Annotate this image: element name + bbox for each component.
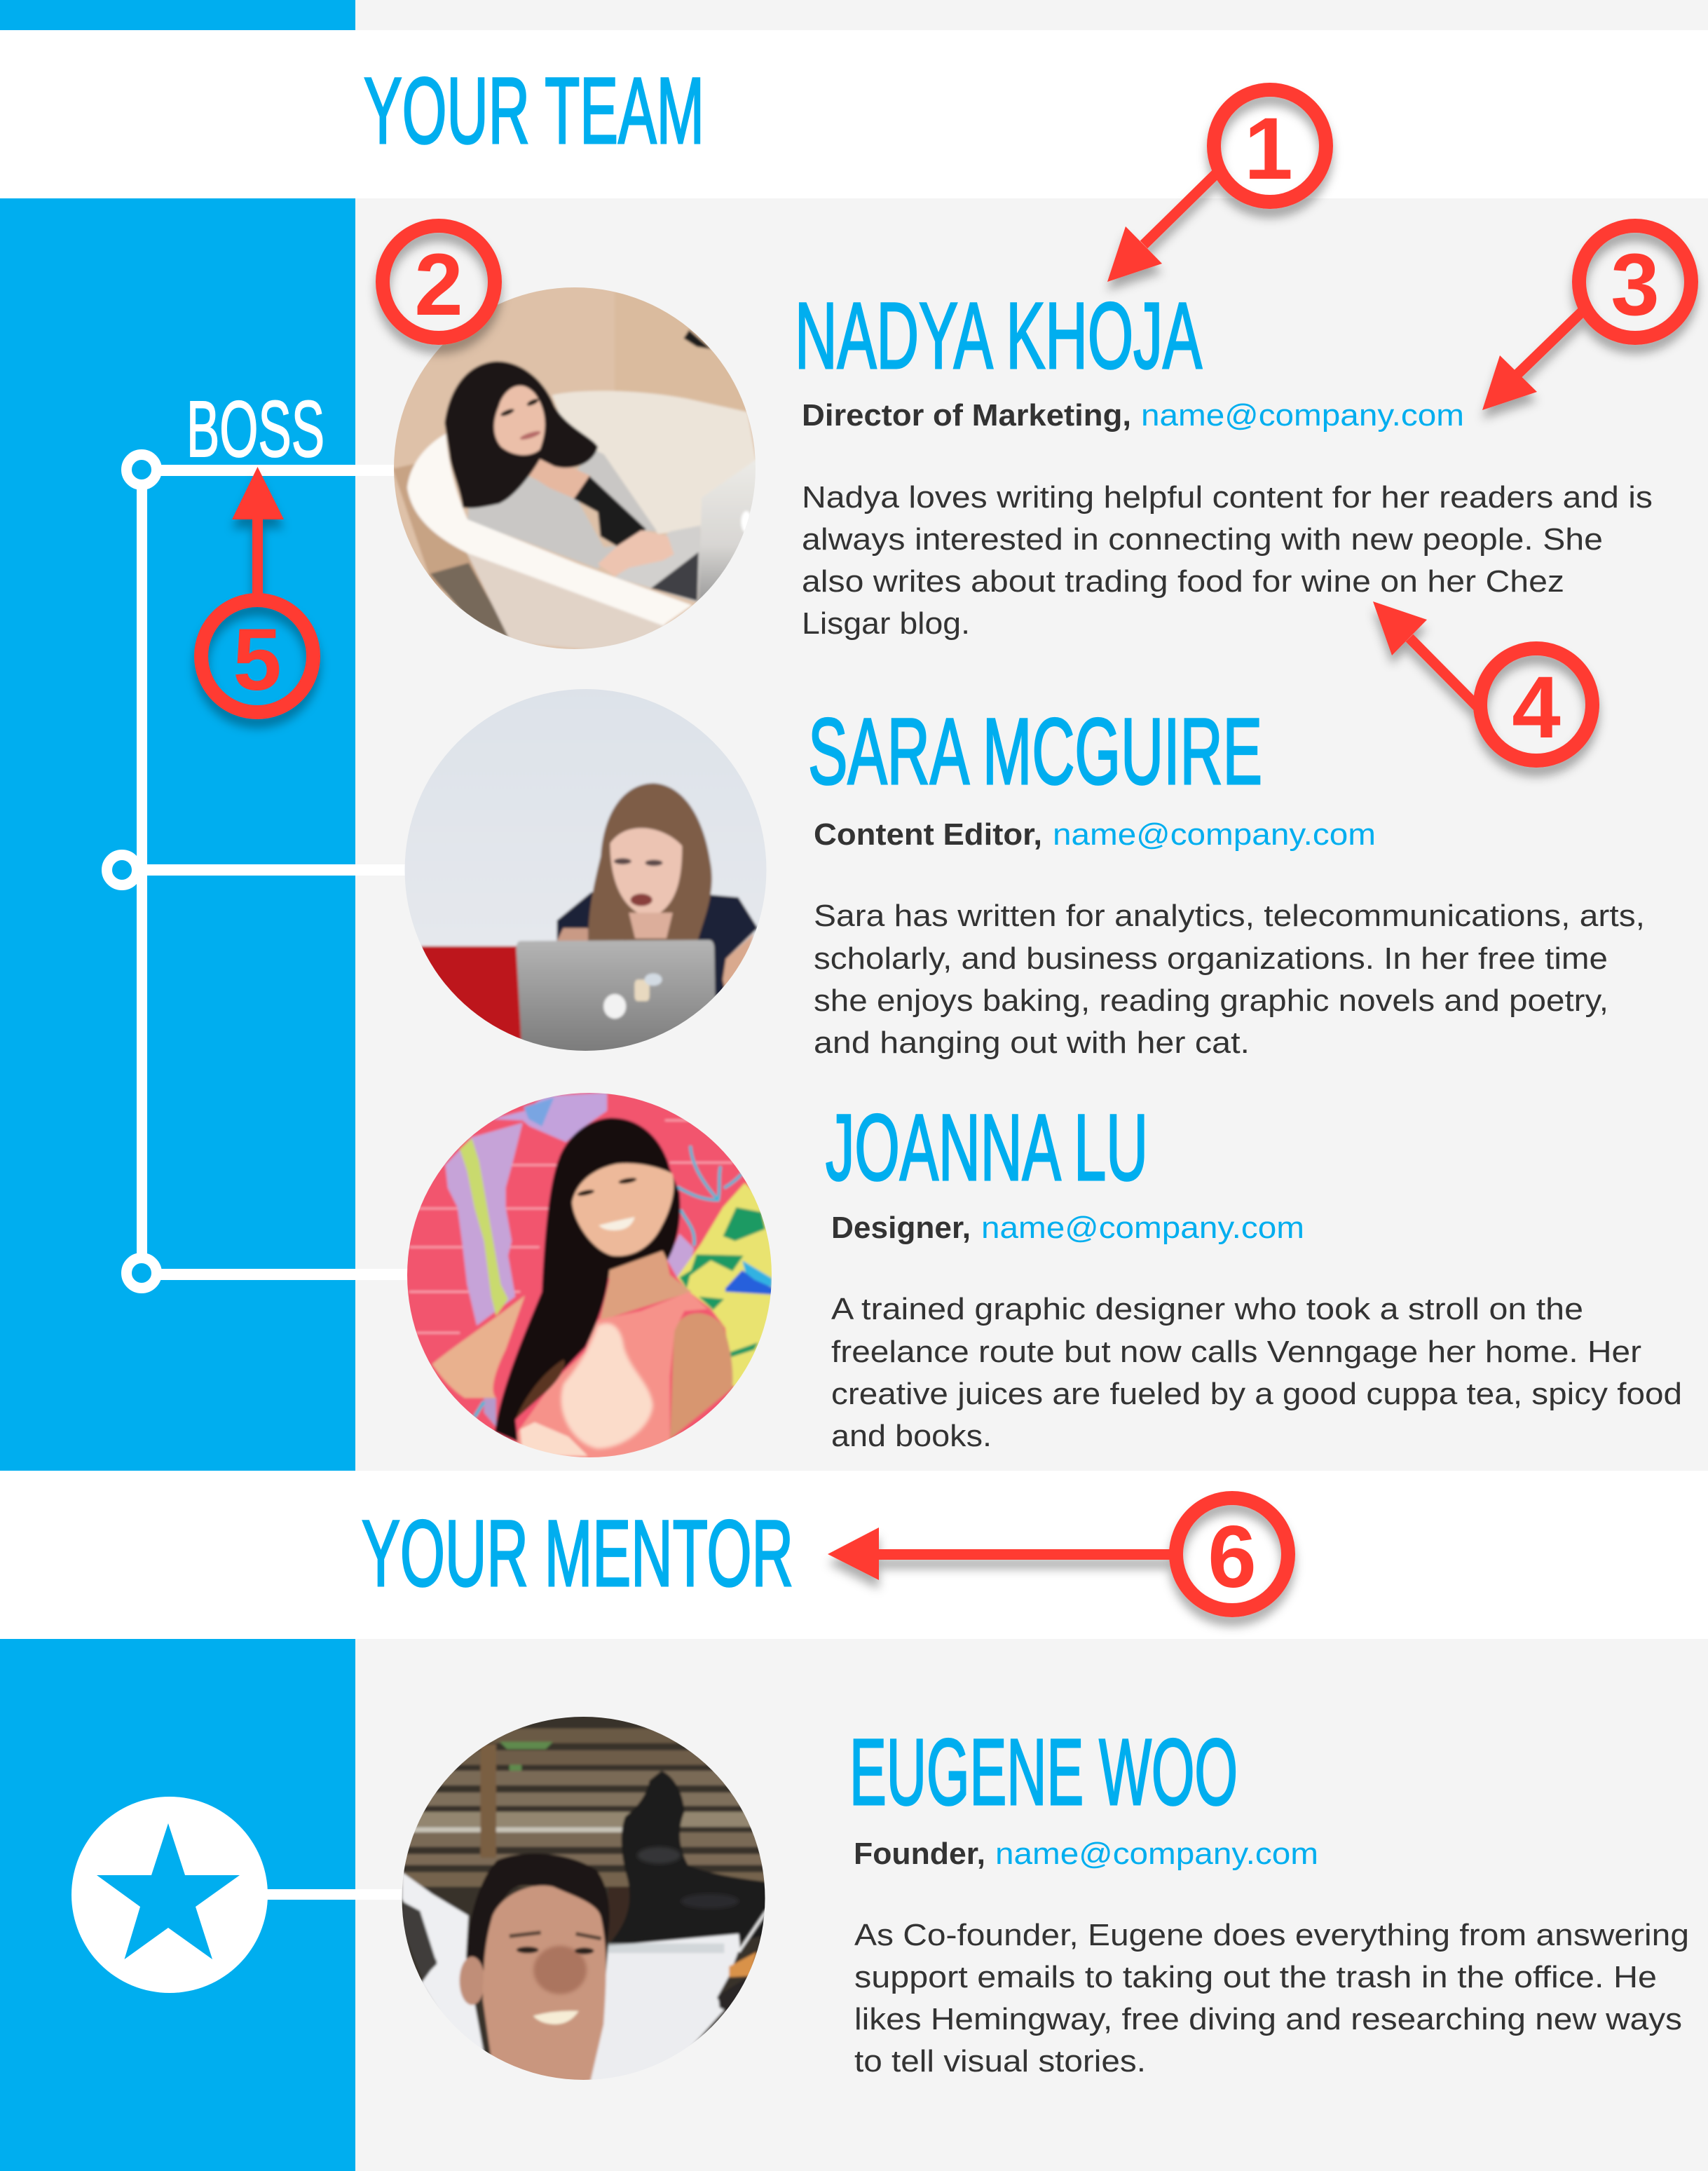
role and email: name@company.com (1141, 398, 1464, 433)
arm and hand (598, 530, 674, 576)
role and email: Founder, (854, 1837, 985, 1871)
bio: always interested in connecting with new people. She (802, 522, 1603, 557)
heading: your team: YOUR TEAM (364, 59, 704, 163)
bio: Nadya loves writing helpful content for her readers and is (802, 480, 1653, 515)
heading: your mentor: YOUR MENTOR (362, 1502, 793, 1606)
role and email: name@company.com (981, 1211, 1304, 1245)
sea lion (608, 1771, 767, 1945)
callout 3: arrow to role and email: 3 (1611, 236, 1660, 334)
chair interior (552, 391, 758, 534)
right shoulder (670, 1313, 732, 1439)
callout 6: arrow to your mentor (828, 1498, 1288, 1610)
bio (831, 1292, 1682, 1453)
callout 1: arrow to name (1107, 90, 1326, 282)
role and email: name@company.com (1053, 817, 1376, 852)
callout 4: arrow to bio (1373, 601, 1592, 761)
hair (467, 1853, 610, 1976)
photo: Eugene Woo (399, 1714, 768, 2087)
label: boss: BOSS (186, 385, 324, 473)
role and email (854, 1837, 1318, 1871)
hair (444, 361, 598, 508)
name: JOANNA LU (826, 1096, 1148, 1200)
photo: Sara McGuire (402, 686, 770, 1062)
left pillow (402, 1872, 490, 2087)
chest (531, 461, 590, 499)
icon: star (97, 1823, 240, 1959)
callout 4: arrow to bio: 4 (1512, 659, 1561, 756)
black top (574, 476, 646, 547)
photo: Joanna Lu (404, 1090, 776, 1463)
role and email (802, 398, 1464, 433)
bio: to tell visual stories. (854, 2044, 1146, 2078)
chair front (467, 553, 665, 649)
role and email: Designer, (831, 1211, 971, 1245)
name: EUGENE WOO (849, 1720, 1238, 1825)
role and email: Director of Marketing, (802, 398, 1131, 433)
wall behind head (608, 1886, 630, 1942)
callout 3: arrow to role and email (1482, 226, 1691, 410)
bio (814, 899, 1645, 1060)
right pillow (587, 1934, 740, 2087)
role and email: name@company.com (995, 1837, 1318, 1871)
ear (460, 1956, 484, 2005)
role and email (814, 817, 1376, 852)
person: Sara McGuire (808, 700, 1645, 1060)
bio: A trained graphic designer who took a stroll on the (831, 1292, 1583, 1326)
photo: Nadya Khoja (391, 285, 762, 657)
callout 5: arrow to boss label: 5 (233, 611, 282, 709)
bio: Sara has written for analytics, telecommunications, arts, (814, 899, 1645, 933)
org chart connectors (107, 454, 411, 1288)
node: boss (126, 454, 157, 485)
bio: and books. (831, 1419, 992, 1453)
left blue column (0, 0, 355, 2171)
hair (495, 1118, 680, 1441)
mentor connector with star badge (71, 1797, 404, 1993)
bio: she enjoys baking, reading graphic novels and poetry, (814, 984, 1608, 1018)
bio (854, 1918, 1689, 2078)
name: NADYA KHOJA (795, 284, 1202, 388)
callout 2: badge on photo: 2 (414, 236, 463, 334)
person: Nadya Khoja (795, 284, 1653, 641)
bio (802, 480, 1653, 641)
brick mortar lines (409, 1120, 732, 1333)
bio: likes Hemingway, free diving and researching new ways (854, 2002, 1682, 2036)
face (483, 1886, 606, 2087)
role and email: Content Editor, (814, 817, 1042, 852)
band: your team (0, 30, 1708, 198)
person: Eugene Woo (849, 1720, 1689, 2078)
face (572, 1164, 674, 1256)
callout 5: arrow to boss label (201, 467, 313, 712)
bio: Lisgar blog. (802, 606, 970, 641)
band: your mentor (0, 1471, 1708, 1639)
person: Joanna Lu (826, 1096, 1682, 1453)
neck (600, 1251, 692, 1321)
role and email (831, 1211, 1304, 1245)
bio: creative juices are fueled by a good cuppa tea, spicy food (831, 1377, 1682, 1411)
callout 6: arrow to your mentor: 6 (1208, 1509, 1257, 1606)
node: designer (126, 1258, 157, 1288)
callout 2: badge on photo (383, 226, 495, 338)
cardigan (467, 476, 617, 569)
laptop screen (699, 458, 758, 603)
arm (432, 1295, 525, 1398)
tub rim (407, 434, 692, 625)
bio: and hanging out with her cat. (814, 1026, 1250, 1060)
laptop base (615, 526, 700, 603)
bio: support emails to taking out the trash in the office. He (854, 1960, 1657, 1994)
name: SARA MCGUIRE (808, 700, 1262, 804)
node: content editor (107, 855, 137, 885)
face (494, 386, 545, 455)
bio: As Co-founder, Eugene does everything from answering (854, 1918, 1689, 1952)
bio: scholarly, and business organizations. In her free time (814, 941, 1608, 976)
dress (515, 1292, 725, 1463)
callout 1: arrow to name: 1 (1244, 100, 1293, 198)
bio: freelance route but now calls Venngage her home. Her (831, 1335, 1641, 1369)
bio: also writes about trading food for wine on her Chez (802, 564, 1564, 599)
